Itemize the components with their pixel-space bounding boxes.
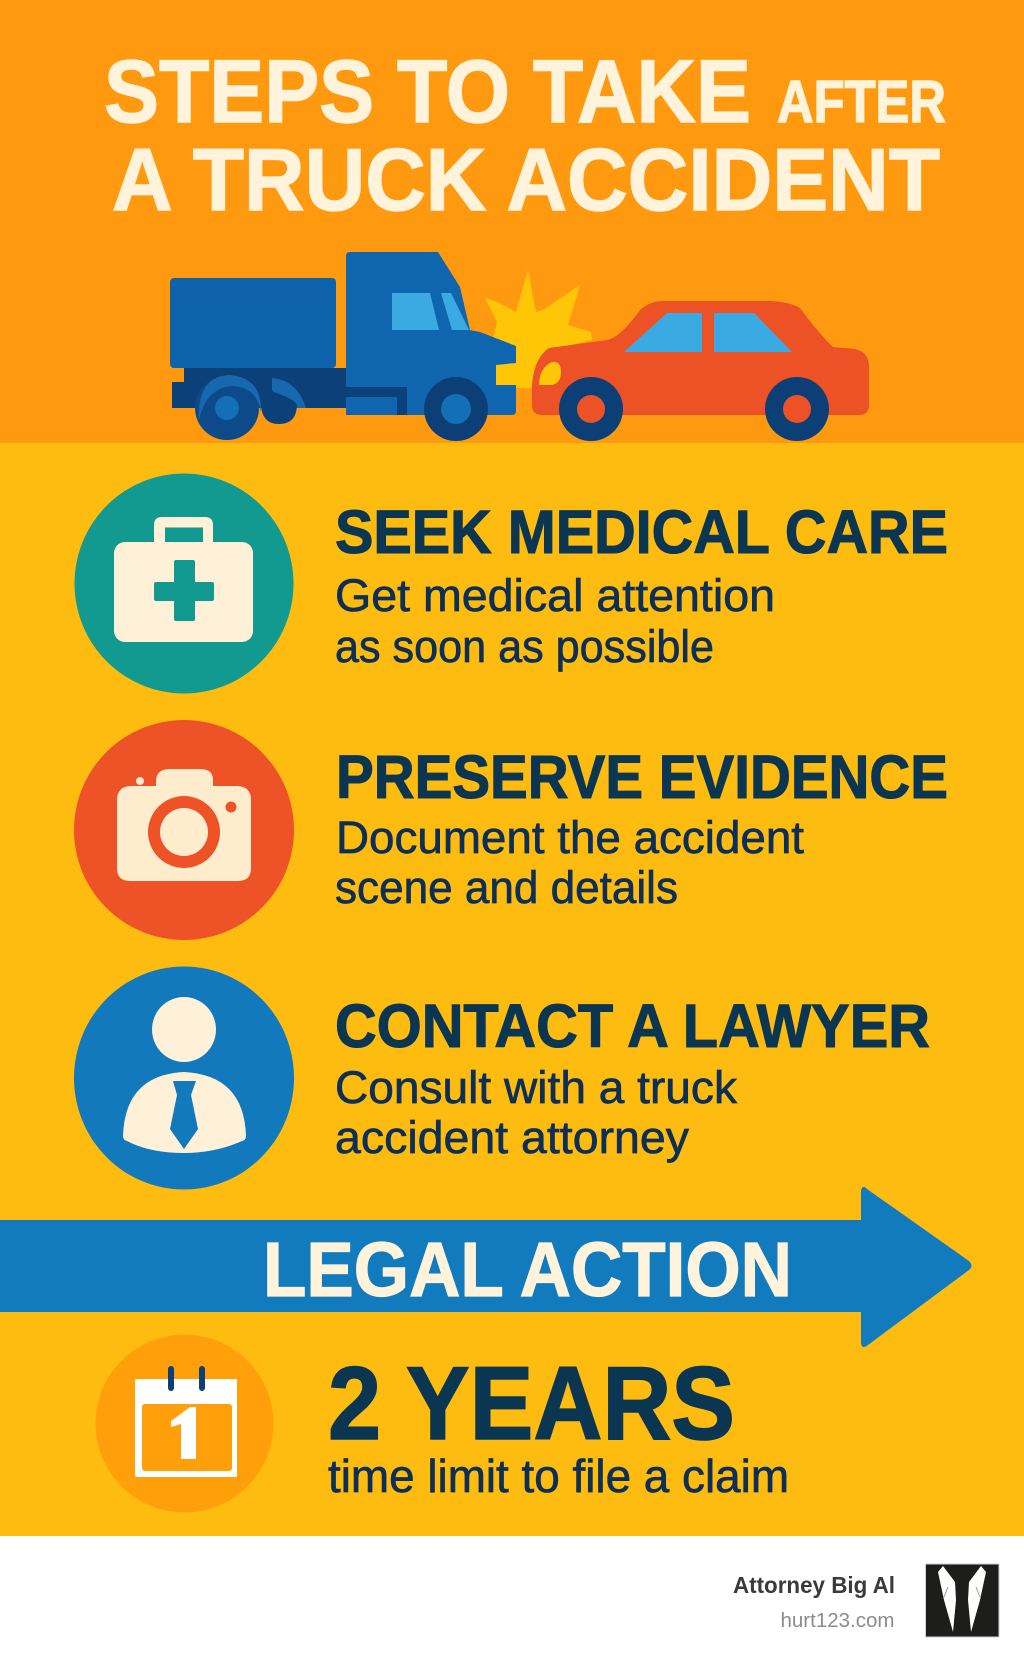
text: step 2 description: scene and details	[335, 862, 678, 913]
arrow: legal action	[0, 1187, 972, 1347]
footer: brand	[733, 1564, 999, 1637]
panel: step 1 seek medical care	[74, 474, 948, 694]
panel: time limit	[96, 1334, 789, 1512]
icon: blue truck	[170, 252, 516, 441]
icon: lawyer	[74, 966, 294, 1190]
icon: collision burst	[485, 270, 592, 388]
text: step 2 description: Document the accident	[336, 812, 805, 863]
text: time limit to file a claim: time limit to file a claim	[328, 1450, 789, 1502]
panel: orange header background	[0, 0, 1024, 443]
icon: camera	[74, 720, 294, 940]
title: AFTER	[777, 69, 946, 135]
text: step 1 description	[335, 570, 775, 672]
title: A TRUCK ACCIDENT	[112, 130, 940, 229]
icon: medical kit	[74, 474, 294, 694]
text: step 3 description	[335, 1062, 738, 1163]
icon: red car	[532, 301, 869, 441]
heading: contact a lawyer: CONTACT A LAWYER	[335, 992, 930, 1060]
heading: legal action: LEGAL ACTION	[263, 1227, 792, 1313]
panel: yellow steps background	[0, 443, 1024, 1536]
stat: 2 years: 2 YEARS	[328, 1346, 735, 1462]
panel: step 2 preserve evidence	[74, 720, 948, 940]
icon: calendar	[96, 1334, 274, 1512]
panel: step 3 contact a lawyer	[74, 966, 930, 1190]
text: step 2 description	[335, 812, 805, 913]
heading: seek medical care: SEEK MEDICAL CARE	[335, 498, 948, 566]
text: step 1 description: Get medical attention	[335, 570, 775, 621]
illustration: truck and car collision	[170, 252, 869, 441]
text: step 3 description: accident attorney	[335, 1112, 690, 1163]
title	[104, 41, 946, 229]
text: step 1 description: as soon as possible	[335, 621, 714, 672]
text: step 3 description: Consult with a truck	[335, 1062, 738, 1113]
title: STEPS TO TAKE	[104, 41, 751, 141]
text: attorney big al: Attorney Big Al	[733, 1572, 895, 1598]
text: website: hurt123.com	[780, 1610, 894, 1632]
panel: white footer background	[0, 1536, 1024, 1666]
icon: suit and tie logo	[926, 1564, 999, 1637]
heading: preserve evidence: PRESERVE EVIDENCE	[336, 743, 948, 811]
